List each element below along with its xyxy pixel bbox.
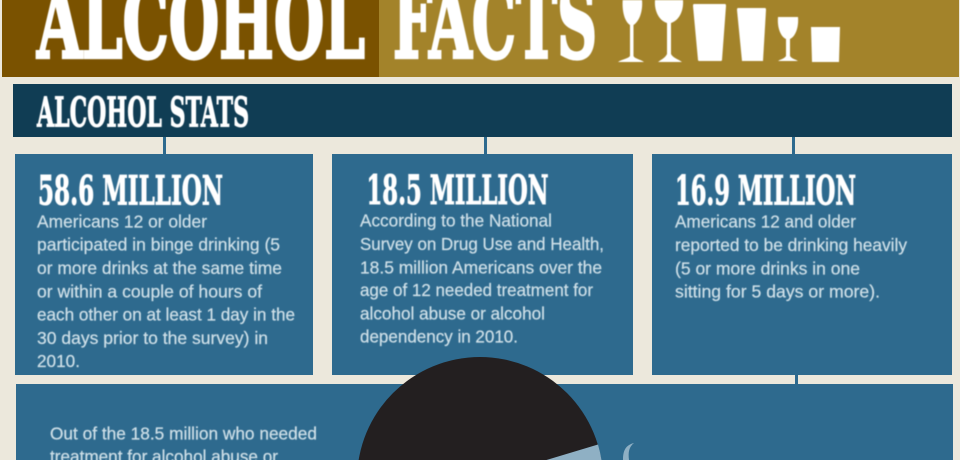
icon: champagne flute [618,0,644,62]
stat description [675,211,907,302]
icon: pint glass [693,4,726,61]
stat description: alcohol abuse or alcohol [360,303,545,323]
stat description: each other on at least 1 day in the [37,305,295,325]
treatment text: Out of the 18.5 million who needed [50,423,317,443]
stat description [37,211,295,371]
panel: 18.5 million [332,154,633,375]
stat description: 18.5 million Americans over the [360,257,602,277]
icon: wine glass [655,0,683,62]
stat description: or more drinks at the same time [37,258,282,278]
stat number: 18.5 MILLION [366,167,548,214]
stat description: sitting for 5 days or more). [675,282,880,302]
stat description [360,211,604,347]
stat number: 58.6 MILLION [38,168,223,214]
icon: small goblet [778,17,798,61]
treatment text [50,423,317,460]
stat description: Americans 12 or older [37,211,207,231]
stat description: Americans 12 and older [675,211,856,231]
stat description: age of 12 needed treatment for [360,280,593,300]
icon: tall beer glass [737,8,766,61]
stat description: According to the National [360,211,552,231]
stat description: 30 days prior to the survey) in [37,328,268,348]
stat description: dependency in 2010. [360,327,518,347]
connectors [163,137,798,384]
panel: 16.9 million [652,154,952,375]
stat description: (5 or more drinks in one [675,258,860,278]
pie chart [357,357,603,460]
panel: treatment breakdown [16,384,953,460]
stat description: Survey on Drug Use and Health, [360,234,604,254]
stat description: participated in binge drinking (5 [37,235,280,255]
section bar: alcohol stats [13,84,952,137]
icon: rocks glass [811,27,840,62]
section heading: ALCOHOL STATS [36,88,249,136]
pie slice: light segment [480,444,603,460]
panel: 58.6 million [15,154,313,375]
stat description: reported to be drinking heavily [675,235,907,255]
stat description: or within a couple of hours of [37,281,262,301]
header banner [2,0,959,77]
stat description: 2010. [37,351,80,371]
icons: row of drinking glasses [618,0,840,62]
icon: curved bracket [623,443,634,460]
